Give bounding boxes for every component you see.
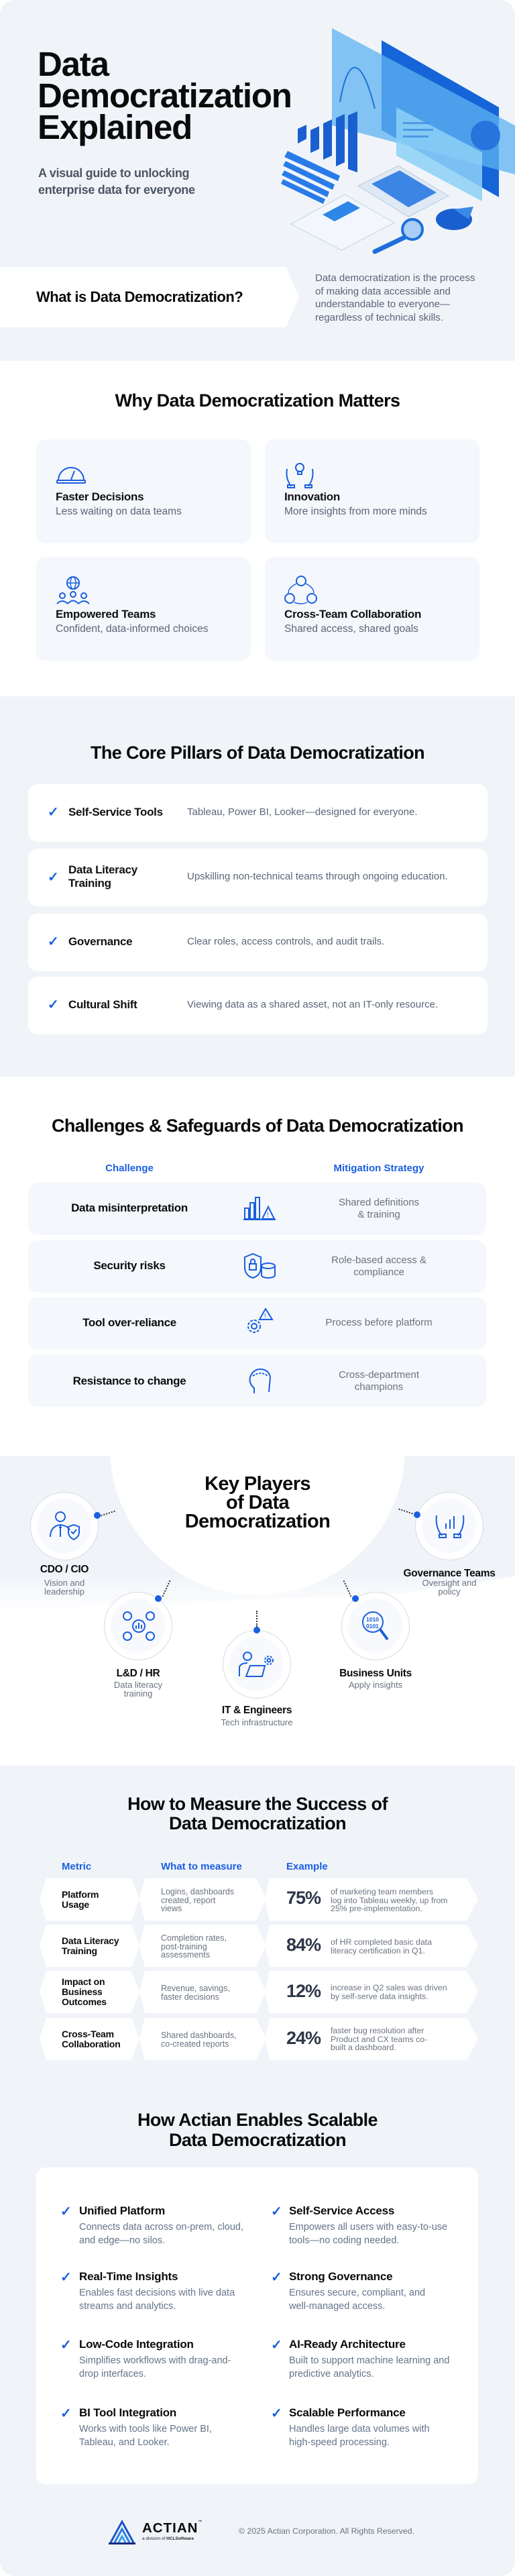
- feature: AI-ready: AI-Ready Architecture: [289, 2338, 406, 2351]
- row: cross-team: 24%: [286, 2028, 321, 2048]
- heading: core pillars: The Core Pillars of Data Democratization: [91, 743, 424, 763]
- player: CDO/CIO: leadership: [44, 1587, 84, 1597]
- card: innovation: Innovation: [284, 490, 340, 503]
- row: platform usage: log into Tableau weekly, up from: [331, 1896, 448, 1905]
- feature: low-code: Low-Code Integration: [79, 2338, 194, 2351]
- row: data literacy: literacy certification in Q1.: [331, 1945, 425, 1955]
- player: business units: Business Units: [339, 1668, 412, 1679]
- row: impact: [62, 1976, 447, 2007]
- row: platform usage: Logins, dashboards: [161, 1887, 234, 1896]
- heading: actian: Data Democratization: [169, 2130, 346, 2150]
- pillars background: [0, 696, 515, 1077]
- pillar: data literacy: [28, 849, 488, 906]
- player: IT & Engineers: Tech infrastructure: [221, 1717, 292, 1727]
- player: business units: 0101: [366, 1623, 379, 1629]
- hero background: [0, 0, 515, 361]
- title: Explained: [38, 108, 192, 146]
- heading: why matters: Why Data Democratization Matters: [115, 390, 400, 411]
- card: cross-team: Cross-Team Collaboration: [284, 608, 421, 621]
- row: impact: 12%: [286, 1981, 321, 2001]
- icon: hands bulb: [286, 463, 314, 488]
- heading: challenges: Challenges & Safeguards of Data Democratization: [52, 1116, 463, 1136]
- row: cross-team: co-created reports: [161, 2039, 229, 2049]
- row: impact: by self-serve data insights.: [331, 1991, 428, 2000]
- feature: unified platform: Unified Platform: [79, 2204, 165, 2217]
- row: cross-team: Shared dashboards,: [161, 2031, 237, 2040]
- title: [38, 45, 292, 146]
- feature: AI-ready: ✓: [271, 2338, 282, 2353]
- pillar: governance: Governance: [68, 935, 132, 948]
- definition text: Data democratization is the process of making data accessible and understandable to everyone—regardless of technical skills.: [315, 272, 475, 323]
- column headers: metrics: Metric: [62, 1861, 91, 1872]
- row: data literacy: Data Literacy: [62, 1935, 119, 1946]
- heading: measure: Data Democratization: [169, 1813, 346, 1833]
- row: platform usage: created, report: [161, 1896, 215, 1905]
- heading: key players: of Data: [226, 1492, 289, 1513]
- subtitle: [38, 166, 195, 197]
- row: cross-team: [62, 2026, 427, 2052]
- key players background: [0, 1456, 515, 1593]
- feature: scalable performance: Scalable Performance: [289, 2406, 406, 2419]
- copyright: © 2025 Actian Corporation. All Rights Reserved.: [239, 2526, 414, 2536]
- row: impact: faster decisions: [161, 1992, 219, 2002]
- player: business units: Apply insights: [349, 1680, 402, 1690]
- row: security: compliance: [353, 1267, 404, 1278]
- heading: key players: Key Players: [205, 1473, 310, 1495]
- row: impact: Impact on: [62, 1976, 105, 1987]
- row: misinterpretation: !: [267, 1212, 269, 1219]
- panel: pillars: [28, 784, 488, 1034]
- player: CDO/CIO: [30, 1492, 115, 1597]
- pillar: cultural shift: Cultural Shift: [68, 998, 137, 1011]
- heading: key players: [185, 1473, 330, 1532]
- row: misinterpretation: [28, 1183, 486, 1235]
- card: innovation: More insights from more minds: [284, 506, 427, 517]
- feature: real-time: [60, 2270, 235, 2312]
- row: misinterpretation: Data misinterpretation: [71, 1201, 188, 1214]
- feature: BI tool: BI Tool Integration: [79, 2406, 176, 2419]
- card: faster decisions: Less waiting on data teams: [56, 506, 182, 517]
- row: tool over-reliance: Tool over-reliance: [82, 1316, 176, 1329]
- row: platform usage: views: [161, 1904, 182, 1913]
- subtitle: A visual guide to unlocking: [38, 166, 189, 180]
- pillar: self-service: Tableau, Power BI, Looker—designed for everyone.: [187, 806, 418, 818]
- card: empowered teams: Empowered Teams: [56, 608, 156, 621]
- player: governance teams: policy: [438, 1587, 461, 1597]
- row: cross-team: built a dashboard.: [331, 2043, 396, 2052]
- player: governance teams: Oversight and: [422, 1578, 476, 1588]
- hero illustration: [281, 28, 515, 254]
- card: faster decisions: [36, 439, 251, 543]
- heading: key players: Democratization: [185, 1511, 330, 1532]
- row: platform usage: 75%: [286, 1888, 321, 1908]
- card: empowered teams: [36, 557, 251, 661]
- feature: low-code: ✓: [60, 2338, 72, 2353]
- row: data literacy: of HR completed basic data: [331, 1937, 432, 1947]
- player: CDO/CIO: CDO / CIO: [40, 1564, 89, 1575]
- feature: low-code: Simplifies workflows with drag-and-drop interfaces.: [79, 2355, 231, 2379]
- pillar: governance: ✓: [48, 934, 59, 949]
- row: security: Security risks: [93, 1259, 166, 1272]
- card: faster decisions: Faster Decisions: [56, 490, 144, 503]
- card: cross-team: [265, 557, 479, 661]
- row: data literacy: Training: [62, 1945, 97, 1956]
- pillar: governance: [28, 914, 488, 971]
- feature: self-service access: Empowers all users with easy-to-use tools—no coding needed.: [289, 2222, 447, 2246]
- heading: measure: [127, 1794, 388, 1833]
- player: governance teams: Governance Teams: [403, 1568, 496, 1579]
- feature: strong governance: [271, 2270, 425, 2312]
- row: resistance: [28, 1354, 486, 1407]
- feature: BI tool: ✓: [60, 2406, 72, 2421]
- what is box: [0, 267, 299, 327]
- column headers: metrics: What to measure: [161, 1861, 242, 1872]
- feature: scalable performance: Handles large data volumes with high-speed processing.: [289, 2424, 430, 2448]
- row: data literacy: post-training: [161, 1941, 207, 1951]
- pillar: data literacy: Training: [68, 877, 111, 890]
- feature: unified platform: Connects data across on-prem, cloud, and edge—no silos.: [79, 2222, 243, 2246]
- heading: actian: [137, 2110, 378, 2150]
- player: CDO/CIO: Vision and: [44, 1578, 84, 1588]
- feature: unified platform: ✓: [60, 2204, 72, 2219]
- feature: self-service access: [271, 2204, 447, 2246]
- row: cross-team: Collaboration: [62, 2039, 121, 2049]
- row: security: Role-based access &: [331, 1254, 426, 1266]
- feature: low-code: [60, 2338, 231, 2379]
- player: business units: 1010: [366, 1616, 379, 1623]
- footer logo: ACTIAN™: [142, 2520, 203, 2536]
- heading: measure: How to Measure the Success of: [127, 1794, 388, 1814]
- card: empowered teams: Confident, data-informed choices: [56, 623, 208, 635]
- column header: mitigation: Mitigation Strategy: [333, 1163, 424, 1174]
- pillar: data literacy: ✓: [48, 870, 59, 885]
- pillar: governance: Clear roles, access controls, and audit trails.: [187, 936, 384, 947]
- player: L&D/HR: [104, 1580, 172, 1699]
- feature: unified platform: [60, 2204, 243, 2246]
- footer logo: a division of HCLSoftware: [142, 2536, 194, 2541]
- pillar: data literacy: Upskilling non-technical teams through ongoing education.: [187, 871, 448, 882]
- feature: scalable performance: [271, 2406, 430, 2448]
- row: platform usage: [62, 1887, 448, 1913]
- card: innovation: [265, 439, 479, 543]
- icon: globe people: [56, 576, 90, 604]
- icon: collaboration: [284, 576, 317, 604]
- pillar: self-service: [28, 784, 488, 842]
- feature: BI tool: Works with tools like Power BI, Tableau, and Looker.: [79, 2424, 212, 2448]
- pillar: cultural shift: Viewing data as a shared asset, not an IT-only resource.: [187, 999, 438, 1010]
- row: platform usage: Platform: [62, 1889, 99, 1900]
- row: platform usage: 25% pre-implementation.: [331, 1904, 422, 1913]
- pillar: cultural shift: ✓: [48, 998, 59, 1012]
- card: cross-team: Shared access, shared goals: [284, 623, 418, 635]
- pillar: cultural shift: [28, 977, 488, 1034]
- player: IT & Engineers: IT & Engineers: [222, 1705, 292, 1716]
- title: Data: [38, 45, 109, 83]
- row: impact: increase in Q2 sales was driven: [331, 1983, 447, 1992]
- row: data literacy: 84%: [286, 1935, 321, 1955]
- feature: real-time: Real-Time Insights: [79, 2270, 178, 2283]
- pillar: data literacy: Data Literacy: [68, 863, 137, 876]
- heading: actian: How Actian Enables Scalable: [137, 2110, 378, 2130]
- player: IT & Engineers: [221, 1611, 292, 1727]
- row: tool over-reliance: [28, 1297, 486, 1350]
- row: impact: Revenue, savings,: [161, 1984, 230, 1993]
- row: platform usage: Usage: [62, 1899, 89, 1910]
- feature: real-time: Enables fast decisions with live data streams and analytics.: [79, 2288, 235, 2312]
- row: platform usage: of marketing team members: [331, 1887, 433, 1896]
- pillar: self-service: ✓: [48, 805, 59, 820]
- row: resistance: champions: [355, 1381, 403, 1393]
- panel: challenges table: [28, 1183, 486, 1407]
- player: L&D/HR: L&D / HR: [117, 1668, 160, 1679]
- row: cross-team: Cross-Team: [62, 2029, 114, 2039]
- icon: gauge: [56, 467, 86, 484]
- feature: BI tool: [60, 2406, 212, 2448]
- row: impact: Business: [62, 1986, 103, 1997]
- row: cross-team: faster bug resolution after: [331, 2026, 424, 2035]
- measure section background: [0, 1766, 515, 2576]
- player: business units: [339, 1580, 412, 1690]
- feature: strong governance: Ensures secure, compliant, and well-managed access.: [289, 2288, 425, 2312]
- title: Democratization: [38, 76, 292, 115]
- column headers: metrics: [62, 1861, 328, 1872]
- subtitle: enterprise data for everyone: [38, 183, 195, 197]
- player: L&D/HR: Data literacy: [114, 1680, 162, 1690]
- row: tool over-reliance: Process before platform: [325, 1317, 433, 1328]
- feature: self-service access: Self-Service Access: [289, 2204, 394, 2217]
- row: data literacy: Completion rates,: [161, 1933, 227, 1943]
- player: L&D/HR: training: [124, 1688, 152, 1699]
- feature: real-time: ✓: [60, 2270, 72, 2285]
- row: resistance: Resistance to change: [73, 1375, 186, 1387]
- feature: AI-ready: Built to support machine learning and predictive analytics.: [289, 2355, 449, 2379]
- row: resistance: Cross-department: [339, 1369, 419, 1381]
- panel: benefits: [36, 439, 479, 661]
- feature: strong governance: Strong Governance: [289, 2270, 392, 2283]
- what is box: What is Data Democratization?: [36, 288, 243, 305]
- feature: scalable performance: ✓: [271, 2406, 282, 2421]
- measure table: [40, 1878, 478, 2060]
- row: cross-team: Product and CX teams co-: [331, 2034, 427, 2043]
- row: tool over-reliance: !: [264, 1313, 266, 1320]
- feature: self-service access: ✓: [271, 2204, 282, 2219]
- pillar: self-service: Self-Service Tools: [68, 806, 163, 818]
- player: governance teams: [398, 1492, 496, 1597]
- row: security: [28, 1240, 486, 1293]
- row: impact: Outcomes: [62, 1996, 107, 2007]
- footer logo: [109, 2520, 203, 2544]
- feature: AI-ready: [271, 2338, 449, 2379]
- row: misinterpretation: & training: [357, 1209, 400, 1220]
- row: misinterpretation: Shared definitions: [339, 1197, 419, 1208]
- row: data literacy: [62, 1933, 432, 1960]
- panel: actian features: [36, 2167, 478, 2484]
- column header: challenge: Challenge: [105, 1163, 154, 1174]
- column headers: metrics: Example: [286, 1861, 328, 1872]
- row: data literacy: assessments: [161, 1950, 210, 1960]
- feature: strong governance: ✓: [271, 2270, 282, 2285]
